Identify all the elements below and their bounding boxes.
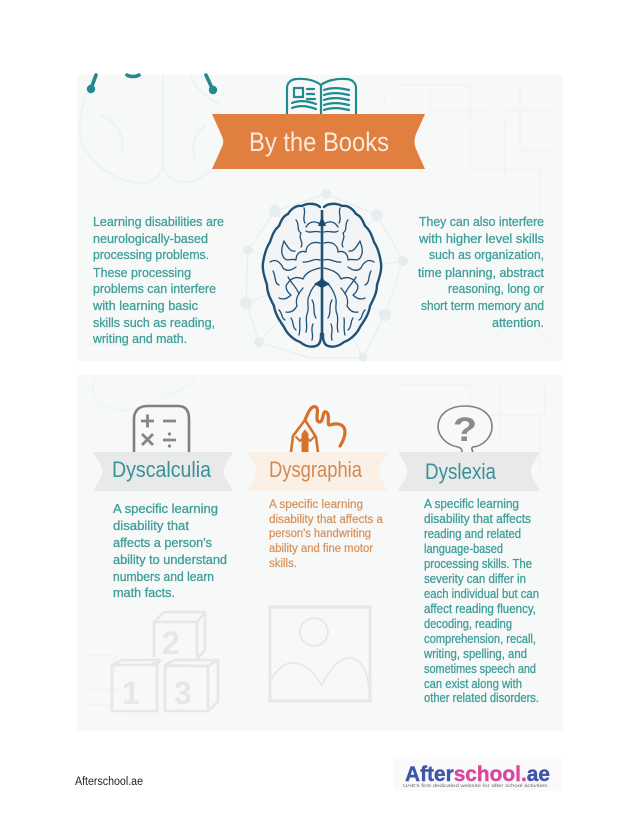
text: dyscalculia description: affects a person's (113, 536, 212, 550)
text: intro right (418, 214, 545, 330)
text: dyslexia description: reading and related (424, 527, 521, 541)
network behind brain (240, 189, 408, 362)
text: dysgraphia description (269, 499, 384, 570)
text: dyscalculia description (113, 502, 227, 600)
footer text: Afterschool.ae (75, 776, 143, 788)
text: dyslexia description: processing skills. The (424, 557, 532, 571)
icon: stethoscope ends (89, 75, 215, 92)
text: intro left: neurologically-based (93, 231, 208, 246)
column: dysgraphia (247, 407, 388, 701)
icon: calculator (134, 406, 189, 452)
text: intro right: with higher level skills (418, 231, 544, 246)
text: intro left: Learning disabilities are (93, 214, 224, 229)
text: intro right: time planning, abstract (418, 265, 544, 280)
text: dyslexia description: language-based (424, 542, 503, 556)
icon: number blocks: 1 (122, 675, 140, 711)
column: dyscalculia (93, 406, 233, 711)
icon: number blocks: 2 (162, 625, 180, 661)
text: dyslexia description: A specific learning (424, 497, 519, 511)
heading: dyscalculia: Dyscalculia (112, 457, 212, 482)
text: dyslexia description: affect reading fluency, (424, 602, 536, 616)
background: faint brain outline (80, 75, 225, 183)
text: dyscalculia description: A specific learning (113, 502, 218, 516)
text: dysgraphia description: disability that affects a (269, 514, 384, 526)
logo: afterschool.ae: UAE's first dedicated website for after school activities. (403, 783, 549, 788)
heading: dyslexia: Dyslexia (425, 459, 497, 484)
text: intro left: processing problems. (93, 247, 209, 262)
text: dyslexia description: can exist along with (424, 677, 522, 691)
text: intro left (92, 214, 224, 346)
background: faint pattern (85, 375, 555, 715)
text: dyscalculia description: math facts. (113, 586, 175, 600)
text: dyscalculia description: numbers and learn (113, 570, 214, 584)
icon: question bubble (438, 406, 492, 452)
text: intro right: such as organization, (429, 247, 544, 262)
heading: dysgraphia: Dysgraphia (269, 457, 363, 482)
text: dyslexia description: writing, spelling, and (423, 647, 527, 661)
background: faint circuit pattern (85, 85, 555, 345)
text: dyslexia description: sometimes speech and (424, 662, 536, 676)
ribbon: dyslexia (398, 452, 540, 491)
text: dyslexia description (423, 497, 539, 705)
text: dyslexia description: other related disorders. (424, 691, 539, 705)
icon: brain (263, 204, 381, 347)
icon: pencil and scribble (291, 407, 345, 452)
ribbon: dyscalculia (93, 452, 233, 491)
text: dyscalculia description: disability that (113, 519, 190, 533)
text: dyslexia description: disability that affects (424, 512, 531, 526)
icon: open book (287, 79, 356, 114)
text: intro right: short term memory and (421, 298, 544, 313)
panel: by the books (77, 75, 563, 362)
text: intro left: with learning basic (92, 298, 198, 313)
text: intro right: reasoning, long or (448, 281, 545, 296)
text: dysgraphia description: A specific learning (269, 499, 363, 511)
logo: afterschool.ae: Afterschool.ae (405, 763, 550, 786)
text: intro left: These processing (93, 265, 191, 280)
text: dysgraphia description: person's handwriting (269, 528, 371, 540)
text: dyslexia description: decoding, reading (424, 617, 512, 631)
column: dyslexia (398, 406, 540, 705)
panel: disorders (77, 375, 563, 731)
text: dysgraphia description: skills. (269, 558, 297, 570)
ribbon: dysgraphia (247, 452, 388, 491)
text: dyslexia description: each individual but can (424, 587, 539, 601)
text: dyslexia description: comprehension, recall, (424, 632, 536, 646)
icon: number blocks (112, 612, 218, 711)
text: intro left: writing and math. (92, 331, 187, 346)
text: intro left: skills such as reading, (93, 315, 215, 330)
text: dysgraphia description: ability and fine motor (269, 543, 373, 555)
text: dyslexia description: severity can differ in (424, 572, 526, 586)
heading: by the books: By the Books (249, 127, 389, 157)
icon: number blocks: 3 (174, 675, 192, 711)
icon: question bubble: ? (453, 411, 477, 449)
text: intro left: problems can interfere (93, 281, 216, 296)
text: intro right: They can also interfere (419, 214, 544, 229)
text: intro right: attention. (492, 315, 544, 330)
icon: picture placeholder (270, 607, 370, 701)
logo: afterschool.ae (393, 759, 561, 791)
text: dyscalculia description: ability to understand (113, 553, 227, 567)
banner: by the books (212, 114, 425, 169)
